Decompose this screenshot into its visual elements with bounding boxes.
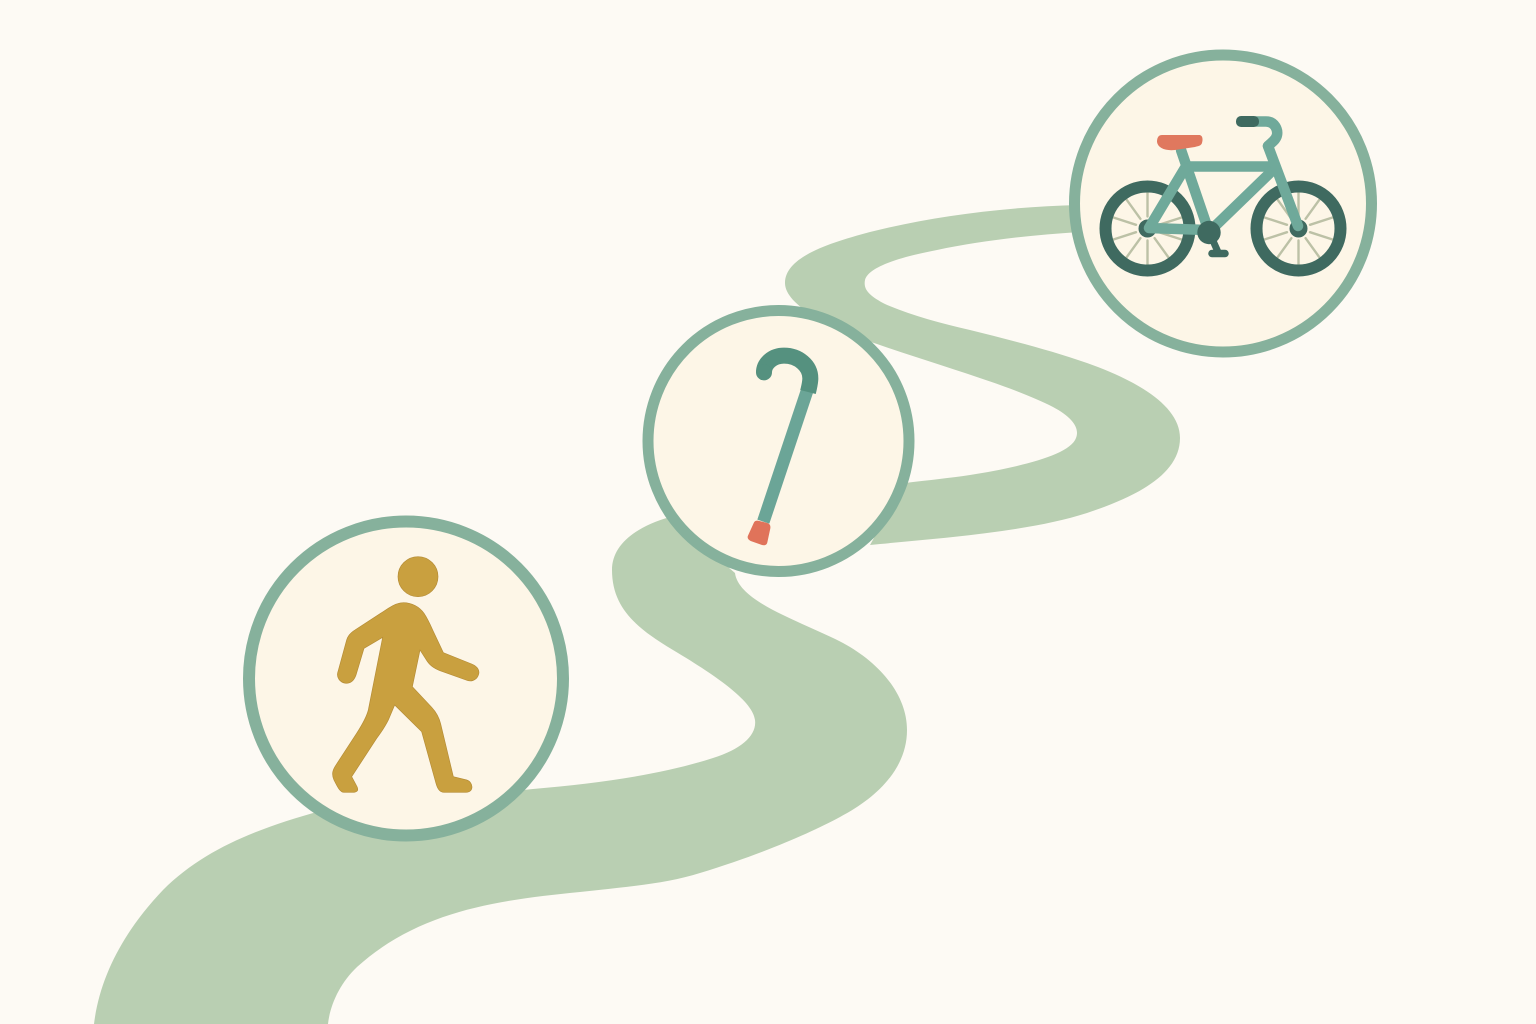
bottom bracket — [1197, 221, 1221, 244]
frame — [1149, 122, 1298, 232]
badge ring — [648, 310, 909, 572]
path: upper section from cane to bicycle — [785, 205, 1180, 545]
milestone: bicycle — [1074, 55, 1372, 352]
path: lower section from start to cane — [94, 517, 907, 1024]
cane handle — [764, 356, 810, 392]
pedal and crank — [1210, 234, 1225, 254]
icon: walking person — [333, 557, 479, 792]
badge ring — [249, 522, 563, 836]
cane shaft — [763, 390, 807, 522]
milestone: walking person — [249, 522, 563, 836]
saddle — [1157, 135, 1203, 150]
winding path — [94, 205, 1180, 1024]
cane handle end — [756, 364, 772, 380]
milestone: walking cane — [648, 310, 909, 572]
handlebar grip — [1236, 116, 1259, 127]
cane tip — [748, 521, 770, 545]
front wheel — [1256, 186, 1340, 270]
icon: bicycle — [1106, 116, 1340, 270]
icon: cane — [748, 356, 810, 545]
badge ring — [1074, 55, 1372, 352]
rear wheel — [1106, 186, 1190, 270]
